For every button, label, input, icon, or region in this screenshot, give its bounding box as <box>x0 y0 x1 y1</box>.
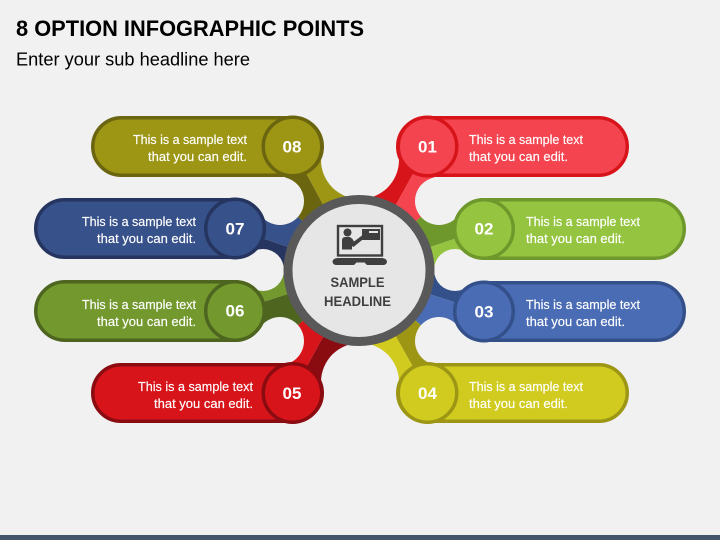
panel: option 02: This is a sample text <box>526 215 641 229</box>
icon: presenter on laptop <box>332 226 387 265</box>
panel: option 04 <box>398 364 627 422</box>
panel: option 03 <box>455 282 684 341</box>
panel: option 06: 06 <box>226 302 244 320</box>
central hub <box>288 200 430 342</box>
panel: option 04: This is a sample text <box>469 380 584 394</box>
panel: option 05: This is a sample text <box>138 380 254 394</box>
panel: option 06: This is a sample text <box>82 298 197 312</box>
panel: option 05: 05 <box>283 384 301 403</box>
hub label: HEADLINE <box>324 293 391 309</box>
title: 8 OPTION INFOGRAPHIC POINTS <box>16 16 364 41</box>
panel: option 05: that you can edit. <box>154 397 253 411</box>
panel: option 08: that you can edit. <box>148 150 247 164</box>
panel: option 07: This is a sample text <box>82 215 197 229</box>
panel: option 07: that you can edit. <box>97 232 196 246</box>
connectors from hub to the eight options <box>235 147 484 394</box>
panel: option 03: that you can edit. <box>526 315 625 329</box>
panel: option 07 <box>36 199 264 258</box>
panel: option 08 <box>93 117 322 176</box>
panel: option 08: This is a sample text <box>133 133 248 147</box>
panel: option 08: 08 <box>283 138 301 156</box>
panel: option 05 <box>93 364 322 422</box>
panel: option 04: 04 <box>418 384 437 403</box>
panel: option 02: 02 <box>475 220 493 238</box>
panel: option 06 <box>36 282 264 340</box>
hub label: SAMPLE <box>330 274 384 290</box>
panel: option 01: 01 <box>418 138 437 156</box>
panel: option 01 <box>398 117 627 176</box>
panel: option 01: This is a sample text <box>469 133 584 147</box>
hub label <box>324 274 391 309</box>
panel: option 03: 03 <box>475 302 493 322</box>
panel: option 01: that you can edit. <box>469 150 568 164</box>
footer bar <box>0 535 720 540</box>
panel: option 04: that you can edit. <box>469 397 568 411</box>
panel: option 03: This is a sample text <box>526 298 641 312</box>
panel: option 02 <box>455 200 684 258</box>
panel: option 06: that you can edit. <box>97 315 196 329</box>
panel: option 07: 07 <box>226 220 244 238</box>
subtitle: Enter your sub headline here <box>16 50 250 70</box>
panel: option 02: that you can edit. <box>526 232 625 246</box>
